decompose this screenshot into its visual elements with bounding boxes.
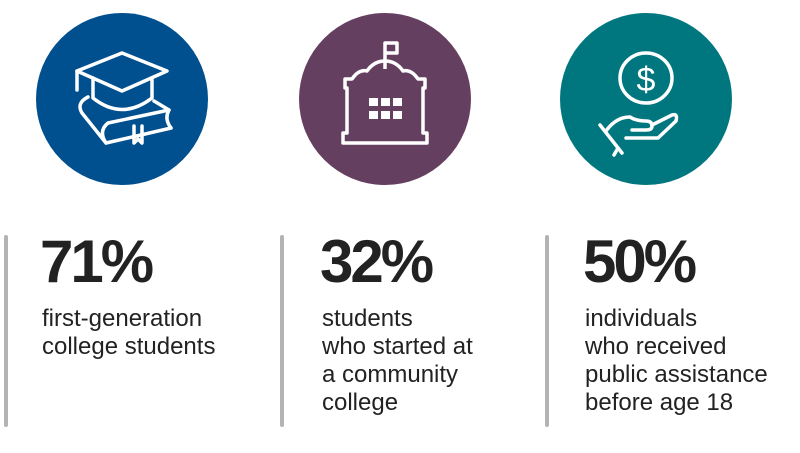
icon circle: hand with coin — [560, 13, 732, 185]
text: who received — [585, 333, 726, 360]
text: 50% — [583, 228, 694, 295]
text: college — [322, 389, 398, 416]
text: 71% — [40, 228, 151, 295]
stat 2 — [280, 228, 473, 427]
text: individuals — [585, 305, 697, 332]
text: college students — [42, 333, 215, 360]
text: who started at — [322, 333, 473, 360]
text: first-generation — [42, 305, 202, 332]
stat 3 — [545, 228, 768, 427]
text: before age 18 — [585, 389, 733, 416]
icon circle: college building — [299, 13, 471, 185]
text: 32% — [320, 228, 431, 295]
text: students — [322, 305, 413, 332]
icon circle: graduation cap — [36, 13, 208, 185]
text: public assistance — [585, 361, 768, 388]
icon circle: hand with coin: $ — [637, 61, 656, 99]
stat 1 — [4, 228, 215, 427]
text: a community — [322, 361, 458, 388]
